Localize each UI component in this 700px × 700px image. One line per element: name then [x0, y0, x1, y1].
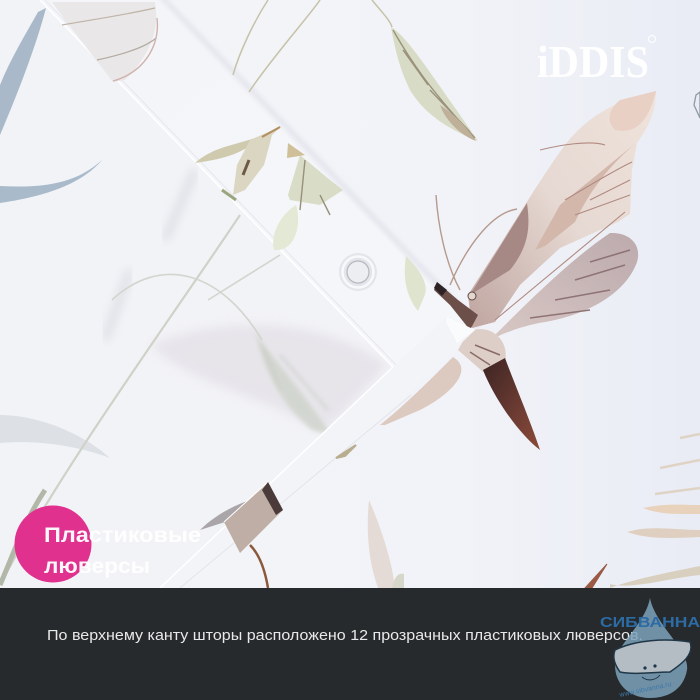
watermark: Сибванна: www.sibvanna.ru	[618, 681, 672, 699]
description text: По верхнему канту шторы расположено 12 прозрачных пластиковых люверсов.	[47, 628, 643, 644]
heading	[44, 523, 201, 578]
watermark: Сибванна: СИБВАННА	[600, 615, 700, 631]
wing fragment on hem	[52, 2, 157, 82]
grass stems top	[233, 0, 392, 92]
leaf near eyelet	[405, 256, 426, 311]
green bud on hem	[273, 143, 343, 250]
top-right fabric flap	[157, 0, 700, 588]
logo: iDDIS: iDDIS	[537, 36, 649, 87]
heading: Пластиковые	[44, 523, 201, 547]
lower right plant	[368, 92, 700, 588]
grass ear top	[391, 27, 478, 141]
blue grass blades	[0, 8, 110, 458]
pink circle	[14, 506, 92, 582]
flower on hem	[195, 126, 282, 200]
dragonfly wing through cut-out	[200, 482, 283, 588]
faint stems through sheer fabric	[0, 215, 280, 585]
dragonfly	[380, 91, 656, 450]
upper hem strip	[40, 0, 479, 367]
heading: люверсы	[44, 554, 150, 578]
left sheer panel	[0, 0, 393, 588]
faint grass ear behind sheer	[255, 332, 332, 435]
dark footer panel	[0, 588, 700, 700]
plastic eyelet	[339, 253, 377, 291]
watermark: Сибванна	[600, 598, 700, 699]
lower hem strip	[160, 317, 475, 588]
